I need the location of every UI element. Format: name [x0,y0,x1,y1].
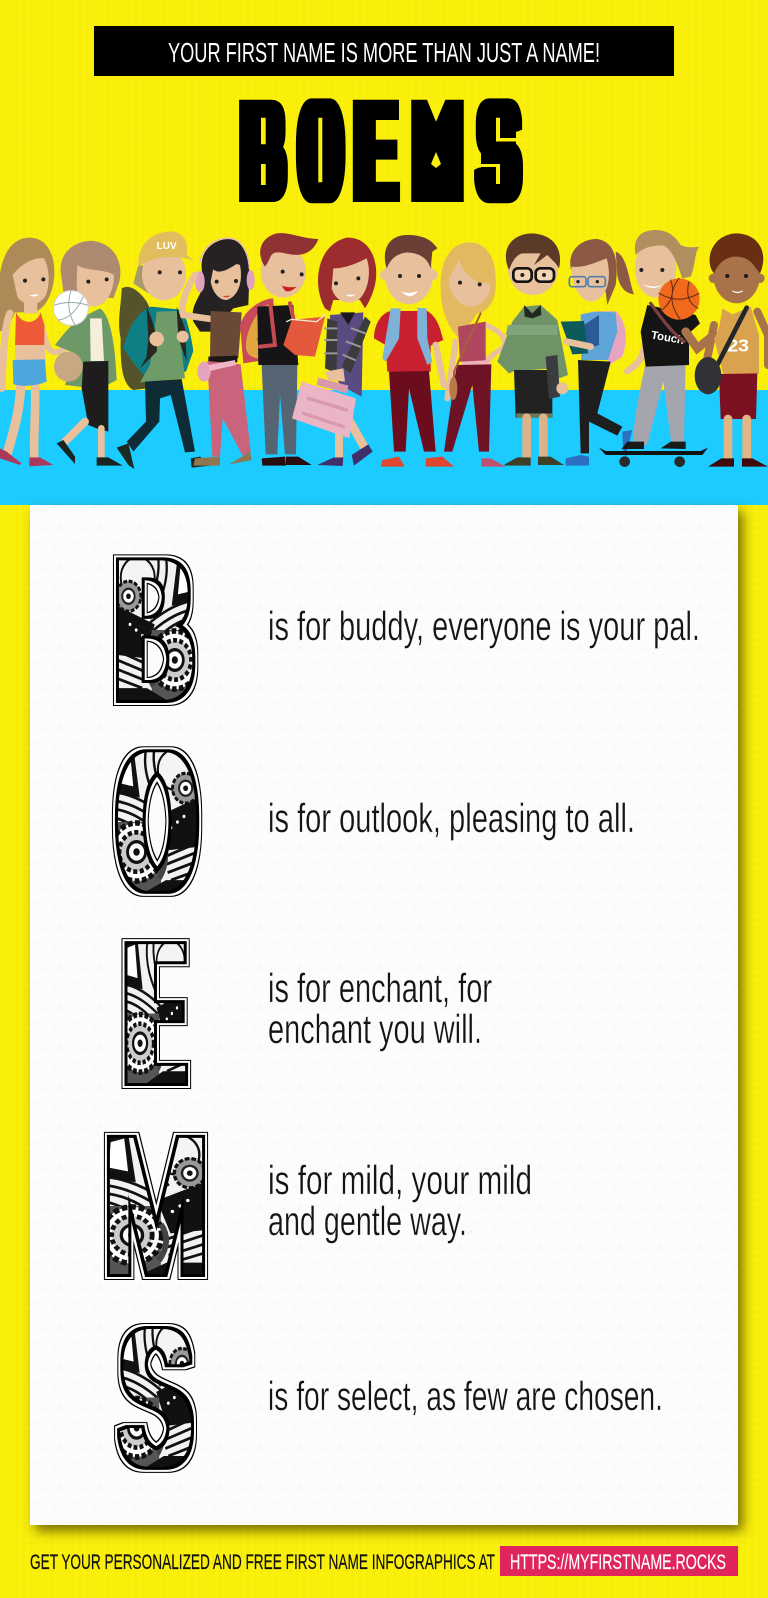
title: B [243,77,282,226]
right group of people [374,230,768,467]
panel: white content card [30,505,738,1525]
ornamental letter M [102,1097,209,1315]
icon: laptop [546,355,560,399]
blue floor band [0,390,768,505]
icon: basketball [658,278,700,320]
header banner [94,26,674,76]
icon: volleyball [54,291,88,325]
text: lines for M [268,1157,532,1244]
person: girl with volleyball arm [0,238,77,466]
ornamental letter M: M [104,1097,208,1315]
footer url badge [500,1546,738,1576]
ornamental letter B [113,519,199,742]
ornamental letter E [120,903,191,1125]
person: skater with basketball [599,230,714,467]
ornamental letter B: B [116,519,192,742]
person: girl with pink bag [292,238,376,466]
icon: shoulder bag [695,357,721,394]
title: E [357,77,393,226]
ornamental letter O: O [122,713,193,929]
person: boy with book [240,233,325,466]
title: O [303,77,339,226]
text: lines for E: enchant you will. [268,1006,482,1052]
text: S [481,77,516,226]
person: girl with pink headphones [182,238,255,466]
ornamental letter O [111,713,202,929]
left group of people [0,232,376,469]
title [243,77,524,226]
person: girl with green jacket [54,241,123,466]
text: E [132,903,178,1125]
person: boy with tank top: 23 [727,336,749,356]
text: lines for M: and gentle way. [268,1198,467,1244]
icon: pink handbag [292,378,356,438]
person: girl with tablet [561,239,634,466]
person: boy with tank top [695,233,768,467]
person: blonde girl [441,242,506,467]
ornamental letter S: S [121,1290,190,1505]
person: backpacker with cap: LUV [157,241,177,252]
text: lines for E: is for enchant, for [268,965,492,1011]
text: lines for M: is for mild, your mild [268,1157,532,1203]
person: boy in red shirt [374,235,454,467]
icon: book [283,317,325,357]
person: backpacker with cap [117,232,210,469]
person: skater with basketball: Touch [650,329,685,347]
person: boy with glasses [497,233,568,466]
text: lines for E [268,965,492,1052]
footer call to action: GET YOUR PERSONALIZED AND FREE FIRST NAME INFOGRAPHICS AT [30,1551,495,1574]
title: M [416,77,459,226]
ornamental letter S [113,1290,197,1505]
icon: skateboard [599,448,708,467]
